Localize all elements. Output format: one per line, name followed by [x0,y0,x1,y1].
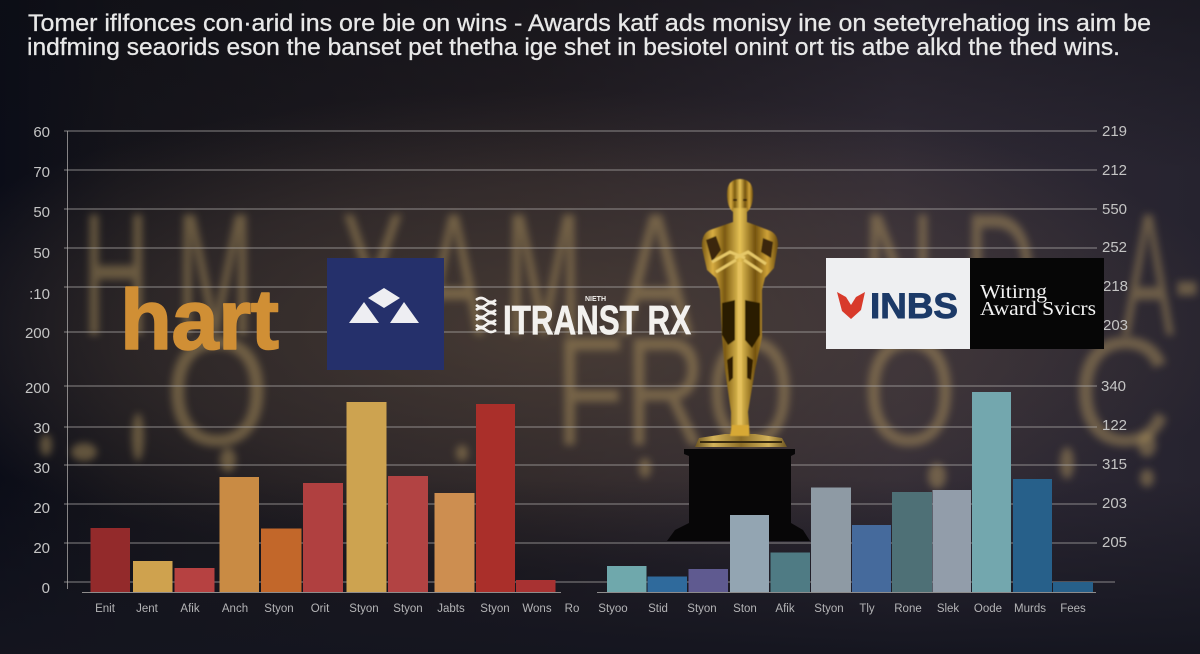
blurred background lettering [40,178,1200,489]
grid lines and axes [64,131,1115,589]
right bar labels: Styoo [598,603,628,615]
logo: transit: NIETH [585,296,606,303]
logo: transit: ITRANST RX [503,297,691,343]
left bar labels: Styon [264,603,294,615]
trophy figure [702,179,778,436]
left axis labels: 30 [33,420,50,437]
title: Tomer iflfonces con·arid ins ore bie on wins - Awards katf ads monisy ine on setetyrehatiog ins aim be [28,10,1151,37]
left bar labels: Ro [565,603,579,615]
right axis labels: 203 [1102,495,1127,512]
right axis labels: 203 [1103,317,1128,334]
logo: INBS and Writing Award panel: Witirng [980,281,1047,303]
left bar labels: Wons [522,603,552,615]
blurred background lettering: Y A M [342,178,582,373]
left axis labels: 200 [25,380,50,397]
left axis labels: 20 [33,500,50,517]
blurred background lettering: H M [82,178,254,373]
left axis labels: 0 [42,580,50,597]
logo: INBS and Writing Award panel [826,258,1104,349]
trophy statuette [667,179,810,541]
left axis labels: 200 [25,325,50,342]
left bar chart [82,402,561,592]
left axis labels: 50 [33,245,50,262]
left axis labels: :10 [29,286,50,303]
right bar labels: Stid [648,603,668,615]
right bar labels: Fees [1060,603,1086,615]
right bar chart [597,392,1096,592]
right bar labels: Slek [937,603,959,615]
right axis labels: 219 [1102,123,1127,140]
right axis labels [1101,123,1128,551]
title: indfming seaorids eson the banset pet thetha ige shet in besiotel onint ort tis atbe alkd the thed wins. [27,34,1120,61]
blurred background lettering: N D [862,178,1037,373]
right axis labels: 252 [1102,239,1127,256]
right bar labels: Oode [974,603,1002,615]
trophy base [667,449,810,541]
logo: transit [476,296,691,343]
right axis labels: 205 [1102,534,1127,551]
blurred background lettering: A [618,178,693,373]
right axis labels: 550 [1102,201,1127,218]
left bar labels: Styon [349,603,379,615]
left axis labels [25,124,50,597]
trophy plate [695,434,787,447]
logo: hart: hart [120,273,279,368]
left bar labels: Styon [480,603,510,615]
right bar labels: Rone [894,603,922,615]
right axis labels: 122 [1102,417,1127,434]
left bar labels: Afik [180,603,200,615]
left bar labels: Enit [95,603,116,615]
right axis labels: 218 [1103,278,1128,295]
right bar labels: Murds [1014,603,1046,615]
blurred background lettering: FRO [555,305,795,478]
blurred background lettering: C [1072,305,1172,478]
left axis labels: 70 [33,164,50,181]
logo: INBS and Writing Award panel: Award Svicrs [980,298,1096,320]
left axis labels: 20 [33,540,50,557]
left bar labels: Styon [393,603,423,615]
blurred background lettering: O [862,305,957,478]
right axis labels: 212 [1102,162,1127,179]
left axis labels: 60 [33,124,50,141]
logo: INBS and Writing Award panel: INBS [870,287,958,326]
left axis labels: 30 [33,460,50,477]
title [27,10,1151,61]
left axis labels: 50 [33,204,50,221]
right axis labels: 315 [1102,456,1127,473]
right axis labels: 340 [1101,378,1126,395]
right bar labels: Styon [687,603,717,615]
right bar labels: Styon [814,603,844,615]
right bar labels: Ston [733,603,757,615]
left bar labels [95,603,579,615]
left bar labels: Orit [311,603,330,615]
blurred background lettering: O [165,305,270,478]
right bar labels: Afik [775,603,795,615]
logo: navy square [327,258,444,370]
left bar labels: Jabts [437,603,465,615]
left bar labels: Jent [136,603,159,615]
left bar labels: Anch [222,603,248,615]
right bar labels [598,603,1086,615]
right bar labels: Tly [859,603,875,615]
